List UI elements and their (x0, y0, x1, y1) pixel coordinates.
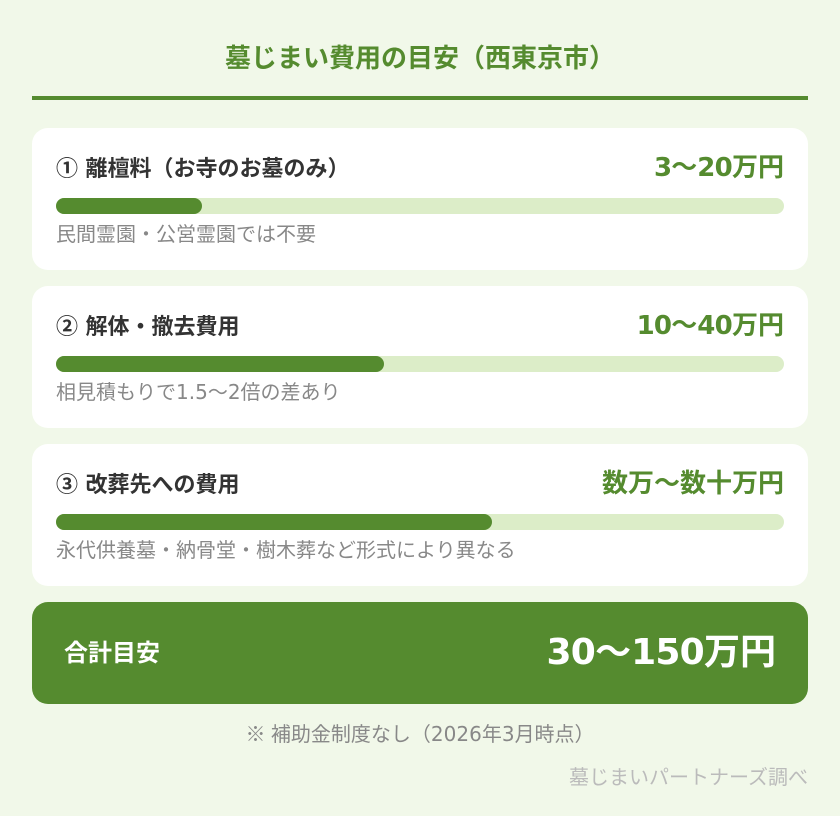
title rule (32, 96, 808, 100)
panel: 離檀料 (32, 128, 808, 270)
panel: total (32, 602, 808, 704)
note: 改葬先への費用: 永代供養墓・納骨堂・樹木葬など形式により異なる (56, 534, 516, 563)
total label: 合計目安 (64, 633, 160, 668)
source credit: 墓じまいパートナーズ調べ (569, 761, 808, 790)
note: 離檀料: 民間霊園・公営霊園では不要 (56, 218, 316, 247)
value: 3〜20万円: 3〜20万円 (654, 147, 784, 184)
progress bar: 解体・撤去費用 (56, 356, 784, 372)
value: 10〜40万円: 10〜40万円 (637, 305, 784, 342)
footnote: ※ 補助金制度なし（2026年3月時点） (245, 718, 595, 747)
title: 墓じまい費用の目安（西東京市） (225, 38, 615, 75)
label: 離檀料: ① 離檀料（お寺のお墓のみ） (56, 151, 350, 183)
panel: 改葬先への費用 (32, 444, 808, 586)
total value: 30〜150万円 (546, 623, 776, 675)
value: 数万〜数十万円: 数万〜数十万円 (602, 463, 784, 500)
label: 改葬先への費用: ③ 改葬先への費用 (56, 467, 240, 499)
progress bar: 離檀料 (56, 198, 784, 214)
panel: 解体・撤去費用 (32, 286, 808, 428)
progress bar: 改葬先への費用 (56, 514, 784, 530)
label: 解体・撤去費用: ② 解体・撤去費用 (56, 309, 240, 341)
note: 解体・撤去費用: 相見積もりで1.5〜2倍の差あり (56, 376, 341, 405)
